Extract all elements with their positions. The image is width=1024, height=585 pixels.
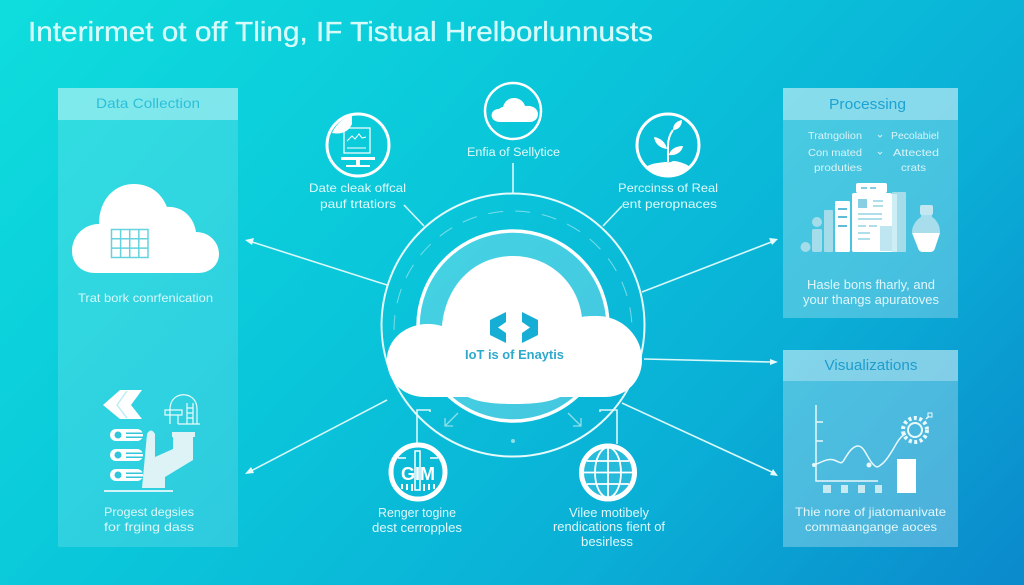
text: processing list: Attected — [893, 147, 939, 159]
text: visualization caption: commaangange aoces — [805, 520, 937, 534]
label: ent peropnaces — [622, 197, 717, 211]
icon: stacked parts and hand — [103, 390, 200, 491]
label — [309, 181, 406, 211]
text: processing caption: your thangs apuratoves — [803, 293, 939, 307]
label: Date cleak offcal — [309, 181, 406, 195]
node: top cloud — [467, 83, 560, 159]
title: Interirmet ot off Tling, IF Tistual Hrelborlunnusts — [28, 16, 653, 47]
text: processing caption: Hasle bons fharly, and — [807, 278, 935, 292]
label: besirless — [581, 535, 633, 549]
heading: data collection: Data Collection — [96, 95, 200, 111]
label: Vilee motibely — [569, 506, 650, 520]
heading: visualizations: Visualizations — [824, 357, 918, 374]
panel: visualization — [783, 350, 958, 547]
node: plant — [618, 114, 718, 211]
connector lines — [245, 163, 778, 476]
cloud label: IoT is of Enaytis — [465, 348, 564, 362]
icon: cloud with grid — [72, 184, 219, 273]
text: cloud caption: Trat bork conrfenication — [78, 291, 213, 305]
central cloud diagram — [382, 194, 644, 456]
label: pauf trtatiors — [320, 197, 396, 211]
heading: processing: Processing — [829, 96, 906, 113]
text: processing list — [808, 130, 939, 174]
node: monitor — [309, 114, 406, 211]
text: visualization caption — [795, 505, 946, 534]
icon: code brackets — [490, 312, 538, 343]
node: chip: GIM — [401, 464, 435, 484]
text: icon caption: Progest degsies — [104, 505, 194, 519]
panel: processing — [783, 88, 958, 318]
label: Renger togine — [378, 506, 456, 520]
label: Enfia of Sellytice — [467, 147, 560, 159]
panel: data collection — [58, 88, 238, 547]
label — [372, 506, 462, 535]
text: processing caption — [803, 278, 939, 307]
icon: gear — [903, 413, 932, 442]
label — [618, 181, 718, 211]
icon: documents and bottle — [800, 183, 940, 252]
label: rendications fient of — [553, 520, 666, 534]
label — [553, 506, 666, 549]
text: icon caption — [104, 505, 194, 534]
node: chip — [372, 445, 462, 535]
text: processing list: produties — [814, 162, 862, 174]
cloud — [387, 256, 642, 404]
text: icon caption: for frging dass — [104, 520, 194, 534]
text: processing list: Pecolabiel — [891, 130, 939, 142]
node: globe — [553, 446, 666, 549]
text: processing list: crats — [901, 162, 926, 174]
text: processing list: Tratngolion — [808, 130, 862, 142]
text: visualization caption: Thie nore of jiatomanivate — [795, 505, 946, 519]
text: processing list: Con mated — [808, 147, 862, 159]
label: Perccinss of Real — [618, 181, 718, 195]
label: dest cerropples — [372, 521, 462, 535]
chart: line chart with bars — [812, 405, 932, 493]
